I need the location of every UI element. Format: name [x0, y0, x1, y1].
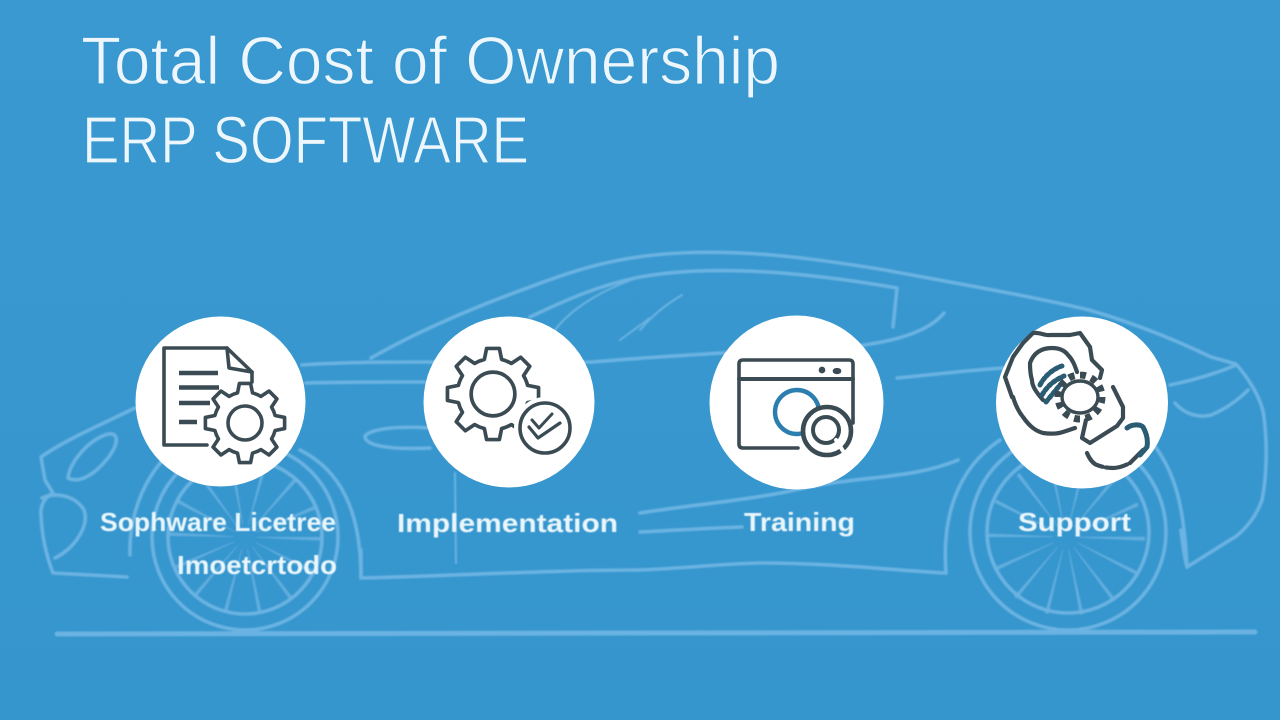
left lower lamp: [42, 495, 85, 558]
right headlamp: [1175, 390, 1248, 416]
label: Imoetcrtodo: [177, 550, 337, 580]
door handle oval: [365, 427, 430, 448]
icon circle: [710, 316, 884, 490]
title: [81, 23, 780, 178]
door line: [455, 473, 456, 563]
sill: [361, 563, 946, 578]
left headlamp: [68, 434, 116, 480]
title: ERP SOFTWARE: [82, 103, 529, 178]
label: Sophware Licetree: [100, 507, 336, 537]
body crease: [640, 460, 958, 513]
panel: software license: [100, 316, 337, 580]
inner window line: [530, 271, 897, 327]
icon: gears, bulb and hand: [1005, 333, 1147, 468]
icon circle: [424, 316, 594, 488]
car outline illustration: [41, 252, 1266, 634]
left wheel: [130, 430, 361, 630]
icon circle: [136, 316, 306, 486]
panel: support: [996, 316, 1168, 537]
icon: document with gear: [164, 348, 285, 463]
label: Training: [744, 507, 855, 537]
title: Total Cost of Ownership: [81, 23, 780, 99]
icon: browser window with magnifier: [739, 360, 853, 455]
ground line: [57, 632, 1255, 634]
roof line: [371, 252, 1266, 567]
label: Support: [1018, 507, 1131, 537]
right wheel: [945, 434, 1187, 630]
side window sill: [302, 313, 944, 365]
label: [100, 507, 337, 580]
front left hood and nose: [41, 408, 135, 577]
pillar lines: [640, 295, 682, 330]
panel: implementation: [397, 316, 618, 538]
icon circle: [996, 316, 1168, 488]
icon: gear with check badge: [447, 348, 576, 459]
label: Implementation: [397, 508, 618, 538]
panel: training: [710, 316, 884, 537]
